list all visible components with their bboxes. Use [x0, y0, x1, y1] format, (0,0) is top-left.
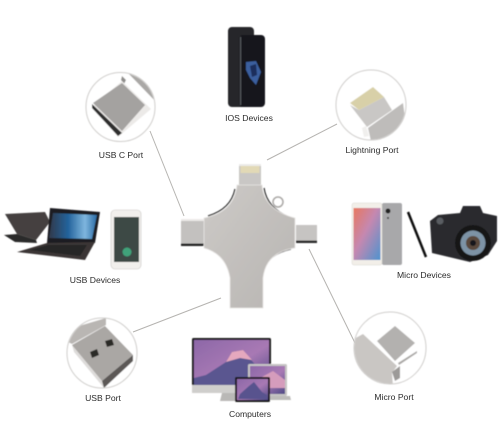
- cross body: [204, 185, 295, 308]
- central USB drive: [181, 164, 317, 308]
- circle: Lightning Port: [336, 70, 408, 141]
- label: Computers: Computers: [229, 409, 271, 419]
- devices: laptops and phone: [4, 208, 141, 269]
- label: Micro Devices: Micro Devices: [397, 270, 451, 280]
- label: IOS Devices: IOS Devices: [225, 113, 273, 123]
- USB C connector: [181, 219, 204, 246]
- shadow edges: [208, 188, 291, 264]
- devices: micro phone, stylus and camera: [352, 203, 497, 265]
- laptop: [246, 364, 291, 400]
- label: Micro Port: Micro Port: [374, 392, 414, 402]
- devices: iPhones: [228, 27, 265, 107]
- cable: [408, 212, 426, 257]
- label: USB C Port: USB C Port: [99, 150, 144, 160]
- key ring: [273, 197, 283, 207]
- tablet: [235, 377, 270, 402]
- front laptop: [17, 208, 100, 260]
- circle: USB C Port: [86, 72, 158, 142]
- iMac: [192, 338, 271, 401]
- circle: Micro Port: [352, 312, 426, 386]
- rear laptop: [4, 212, 50, 243]
- micro connector: [296, 225, 317, 243]
- phone: [352, 203, 402, 265]
- camera: [430, 206, 497, 262]
- devices: computers: [192, 338, 291, 402]
- lightning connector: [239, 164, 261, 186]
- label: USB Devices: USB Devices: [70, 275, 120, 285]
- circle: USB Port: [66, 318, 137, 388]
- label: Lightning Port: Lightning Port: [345, 145, 399, 155]
- label: USB Port: USB Port: [85, 393, 122, 403]
- phone: [111, 210, 141, 269]
- connector lines: [133, 124, 355, 343]
